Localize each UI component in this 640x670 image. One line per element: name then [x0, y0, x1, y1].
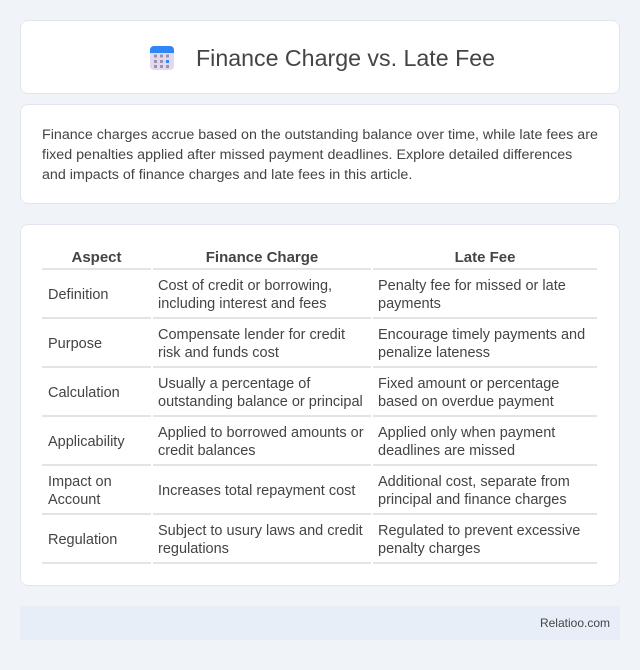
- comparison table: risk and funds cost: [158, 345, 279, 361]
- comparison table: Regulated to prevent excessive: [378, 523, 580, 539]
- row: purpose: Purpose: [48, 336, 102, 352]
- row: impact on account: Account: [48, 492, 100, 508]
- comparison table: payments: [378, 296, 441, 312]
- row: impact on account: [48, 474, 112, 508]
- row: applicability: Applicability: [48, 434, 125, 450]
- row: regulation: Regulation: [48, 532, 117, 548]
- table panel: [20, 224, 620, 586]
- row: definition: Definition: [48, 287, 108, 303]
- comparison table: Applied to borrowed amounts or: [158, 425, 364, 441]
- row: calculation: Calculation: [48, 385, 120, 401]
- header: late fee: Late Fee: [455, 249, 515, 266]
- title: Finance Charge vs. Late Fee: [196, 45, 495, 71]
- footer bar: [20, 606, 620, 640]
- comparison table: Increases total repayment cost: [158, 483, 355, 499]
- comparison table: Applied only when payment: [378, 425, 555, 441]
- comparison table: regulations: [158, 541, 229, 557]
- comparison table: Additional cost, separate from: [378, 474, 570, 490]
- row: impact on account: Impact on: [48, 474, 112, 490]
- comparison table: penalty charges: [378, 541, 480, 557]
- comparison table: Encourage timely payments and: [378, 327, 585, 343]
- intro panel: [20, 104, 620, 204]
- comparison table: Subject to usury laws and credit: [158, 523, 363, 539]
- header: finance charge: Finance Charge: [206, 249, 318, 266]
- title panel: [20, 20, 620, 94]
- comparison table: principal and finance charges: [378, 492, 567, 508]
- comparison table: including interest and fees: [158, 296, 326, 312]
- comparison table: Compensate lender for credit: [158, 327, 345, 343]
- footer credit: Relatioo.com: [540, 616, 610, 630]
- icon: calendar: [150, 46, 174, 70]
- comparison table: deadlines are missed: [378, 443, 515, 459]
- header: aspect: Aspect: [71, 249, 122, 266]
- intro text: Finance charges accrue based on the outstanding balance over time, while late fees are: [42, 127, 598, 143]
- comparison table: Cost of credit or borrowing,: [158, 278, 332, 294]
- comparison table: Usually a percentage of: [158, 376, 310, 392]
- intro text: and impacts of finance charges and late fees in this article.: [42, 167, 412, 183]
- comparison table: Penalty fee for missed or late: [378, 278, 566, 294]
- comparison table: outstanding balance or principal: [158, 394, 363, 410]
- intro text: [42, 127, 598, 183]
- comparison table: penalize lateness: [378, 345, 490, 361]
- intro text: fixed penalties applied after missed payment deadlines. Explore detailed differences: [42, 147, 572, 163]
- comparison table: Fixed amount or percentage: [378, 376, 559, 392]
- comparison table: credit balances: [158, 443, 256, 459]
- comparison table: based on overdue payment: [378, 394, 554, 410]
